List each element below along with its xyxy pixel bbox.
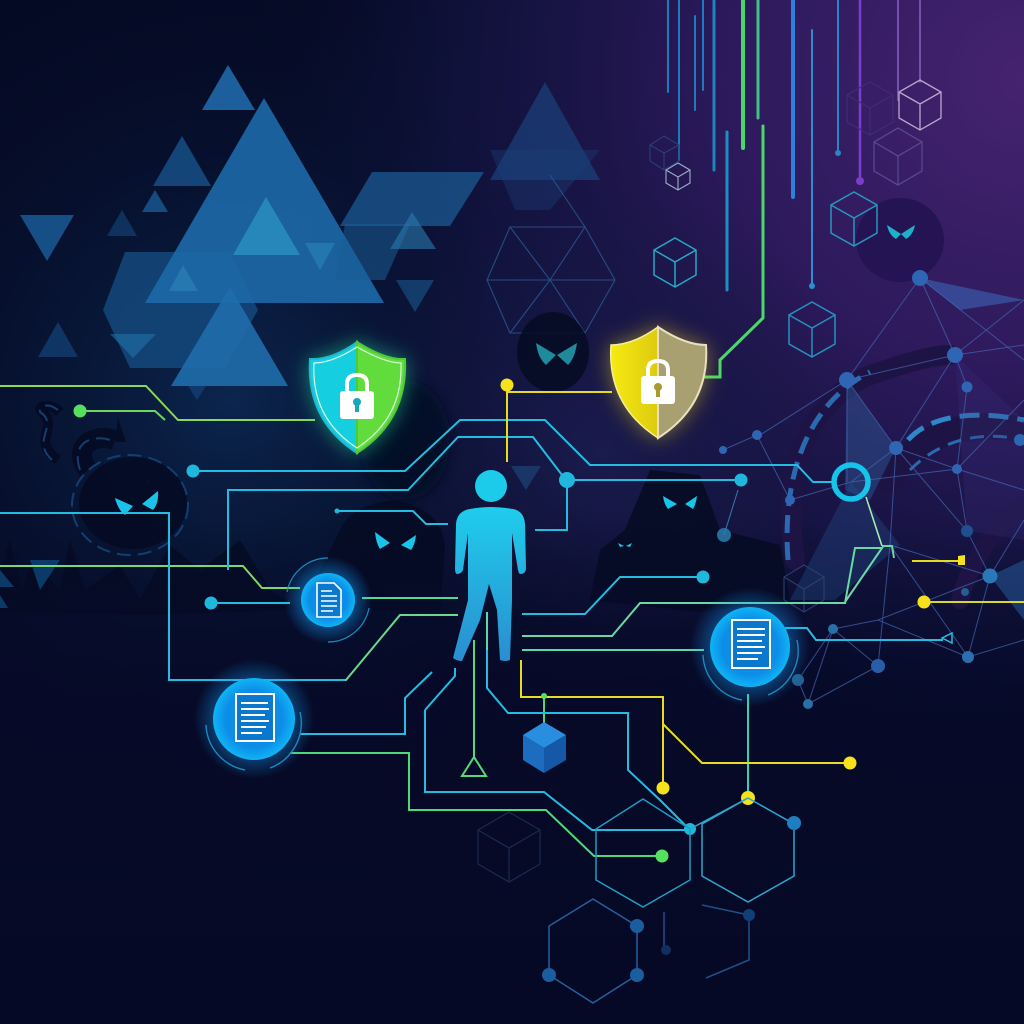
icon: solid blue cube [523, 722, 566, 773]
wire hexagon [487, 175, 615, 333]
creature: centre right mound [590, 470, 790, 612]
small outline triangle marker [462, 633, 952, 776]
dashed creature rings [40, 406, 188, 555]
data line end dots [809, 150, 864, 289]
icon: shield yellow [611, 327, 706, 438]
icon: padlock [641, 361, 675, 404]
icon: person [453, 470, 526, 661]
falling data lines [668, 0, 920, 377]
ground blue fragments [0, 560, 60, 608]
tentacles right [791, 355, 1024, 600]
icon: document left [194, 659, 314, 779]
creature: left [41, 406, 187, 549]
circuit traces: cyan [0, 420, 943, 830]
floor shadow [0, 520, 1024, 1024]
icon: padlock [340, 375, 374, 419]
hexagon nodes [542, 816, 801, 982]
creature: centre top [517, 312, 589, 392]
circuit traces: yellow [507, 385, 1024, 788]
creature eyes [115, 225, 915, 550]
ground silhouette [0, 540, 300, 615]
circuit nodes [74, 378, 965, 862]
icon: shield green and cyan [310, 342, 405, 453]
circuit traces: green [0, 386, 894, 856]
background silhouettes [0, 198, 944, 615]
creature: middle left [300, 500, 445, 610]
icon: document small [284, 556, 372, 644]
wireframe cubes [478, 80, 941, 882]
ring node [834, 465, 868, 499]
shadow behind left shield [360, 380, 450, 500]
plexus network right [717, 270, 1024, 709]
small dark triangle above person [511, 466, 541, 490]
icon: document right [690, 587, 810, 707]
translucent triangle cluster [20, 65, 600, 400]
tentacle dashes [787, 372, 1024, 560]
creature: top right [856, 198, 944, 282]
hexagons bottom [549, 798, 794, 1003]
